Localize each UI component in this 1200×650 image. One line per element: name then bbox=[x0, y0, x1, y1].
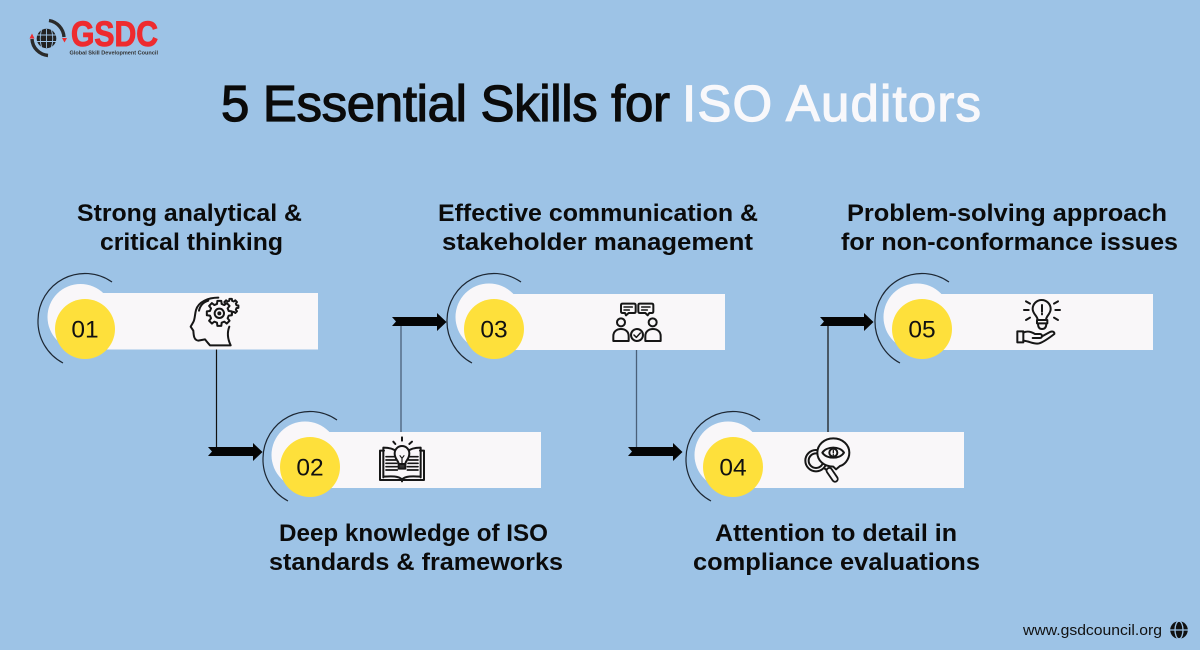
footer website: www.gsdcouncil.org bbox=[1022, 622, 1162, 639]
heading 5: for non-conformance issues bbox=[841, 229, 1178, 256]
step 2 bbox=[263, 411, 563, 576]
card 03: 03 bbox=[480, 316, 508, 344]
connector: step 4 to step 5 bbox=[820, 313, 874, 432]
heading 2: Deep knowledge of ISO bbox=[279, 520, 548, 547]
connector: step 3 to step 4 bbox=[628, 349, 682, 461]
card 02 bbox=[263, 411, 541, 501]
heading 3: stakeholder management bbox=[442, 229, 753, 256]
card 05: 05 bbox=[908, 316, 936, 344]
title highlighted part: ISO Auditors bbox=[682, 75, 981, 132]
heading 1 bbox=[77, 200, 302, 256]
heading 5 bbox=[841, 200, 1178, 256]
heading 4 bbox=[693, 520, 980, 576]
icon: head with gears bbox=[191, 298, 238, 345]
card 01: 01 bbox=[71, 316, 99, 344]
logo globe bbox=[30, 20, 67, 56]
heading 2: standards & frameworks bbox=[269, 549, 563, 576]
heading 1: Strong analytical & bbox=[77, 200, 302, 227]
step 5 bbox=[841, 200, 1178, 363]
card 04: 04 bbox=[719, 454, 747, 482]
icon: two people with speech bubbles bbox=[613, 304, 661, 341]
step 1 bbox=[38, 200, 318, 363]
heading 2 bbox=[269, 520, 563, 576]
card 02: 02 bbox=[296, 454, 324, 482]
logo wordmark: GSDC bbox=[71, 15, 158, 54]
connector: step 1 to step 2 bbox=[208, 349, 262, 461]
logo tagline: Global Skill Development Council bbox=[70, 50, 158, 56]
icon: footer globe bbox=[1170, 621, 1188, 639]
icon: open book with light bulb bbox=[380, 437, 424, 481]
heading 4: compliance evaluations bbox=[693, 549, 980, 576]
heading 4: Attention to detail in bbox=[715, 520, 957, 547]
icon: hand holding light bulb bbox=[1017, 300, 1060, 344]
card 01 bbox=[38, 273, 318, 363]
step 4 bbox=[686, 411, 980, 576]
icon: magnifier with eye bbox=[805, 438, 849, 479]
connector: step 2 to step 3 bbox=[392, 313, 446, 432]
card 04 bbox=[686, 411, 964, 501]
heading 3: Effective communication & bbox=[438, 200, 758, 227]
step 3 bbox=[438, 200, 758, 363]
title bbox=[221, 75, 981, 132]
card 03 bbox=[447, 273, 725, 363]
title dark part: 5 Essential Skills for bbox=[221, 75, 670, 132]
card 05 bbox=[875, 273, 1153, 363]
heading 5: Problem-solving approach bbox=[847, 200, 1167, 227]
heading 1: critical thinking bbox=[100, 229, 283, 256]
logo: GSDC bbox=[30, 15, 158, 56]
heading 3 bbox=[438, 200, 758, 256]
